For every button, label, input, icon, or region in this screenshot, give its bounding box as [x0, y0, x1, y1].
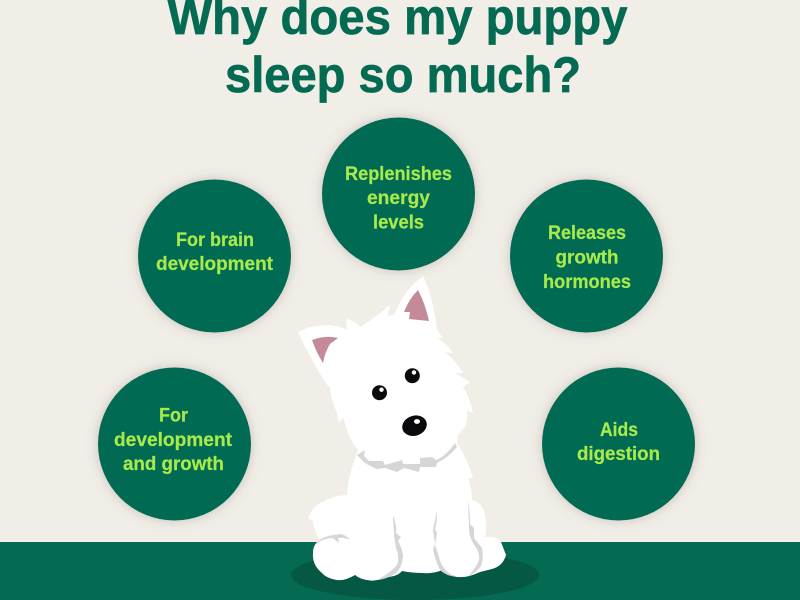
puppy right eye: [405, 368, 420, 383]
title: sleep so much?: [225, 47, 581, 103]
circle: for development and growth: [98, 368, 251, 520]
circle: for development and growth: and growth: [123, 453, 224, 475]
circle: replenishes energy levels: levels: [373, 212, 424, 234]
puppy right ear inner: [404, 290, 429, 321]
circle: aids digestion: [542, 368, 695, 520]
circle: for development and growth: development: [114, 429, 232, 451]
puppy body and head silhouette: [298, 276, 506, 581]
circle: releases growth hormones: Releases: [548, 222, 626, 244]
floor shadow under puppy: [291, 550, 539, 600]
puppy nose: [400, 412, 429, 439]
circle: aids digestion: Aids: [600, 419, 638, 441]
circle: releases growth hormones: growth: [556, 246, 618, 268]
puppy leg fur lines: [316, 500, 483, 580]
circle: for brain development: For brain: [176, 229, 254, 251]
floor band: [0, 542, 800, 600]
circle: for brain development: development: [156, 253, 273, 275]
circle: replenishes energy levels: energy: [367, 187, 430, 209]
circle: for brain development: [138, 180, 291, 332]
circle: replenishes energy levels: Replenishes: [345, 163, 452, 185]
puppy illustration: [298, 276, 506, 581]
puppy collar fur shading: [357, 443, 457, 472]
puppy left ear inner: [312, 337, 338, 363]
puppy left eye: [372, 385, 387, 400]
circle: replenishes energy levels: [322, 118, 475, 270]
circle: aids digestion: digestion: [577, 443, 660, 465]
circle: for development and growth: For: [159, 404, 188, 426]
circle: releases growth hormones: [510, 180, 663, 332]
title: [168, 0, 628, 103]
circle: releases growth hormones: hormones: [543, 271, 631, 293]
